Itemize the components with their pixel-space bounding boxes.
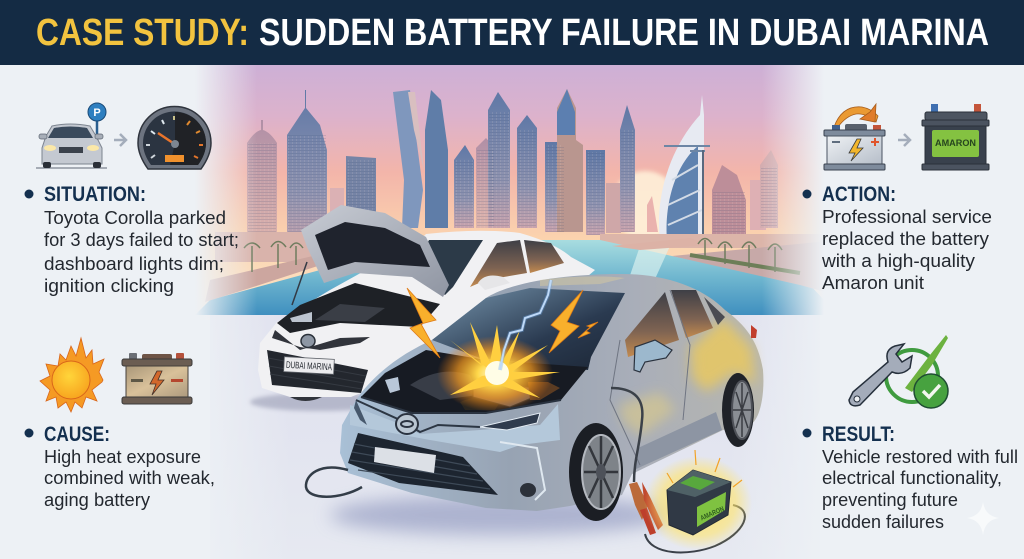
action text: [821, 206, 992, 293]
car body: [340, 274, 763, 511]
bullet: [24, 190, 34, 198]
grille and plate: [267, 350, 368, 393]
icon: dim dashboard gauge: [138, 106, 211, 169]
back white car with open hood: [250, 205, 595, 411]
lower door panel: [634, 412, 722, 470]
situation text: dashboard lights dim;: [44, 253, 224, 274]
icon: new Amaron battery: [922, 104, 989, 170]
headlight: [480, 413, 540, 430]
front logo: [301, 334, 315, 348]
front wheel: [569, 423, 623, 521]
new battery with glow: AMARON: [700, 506, 725, 522]
palm trees: [244, 238, 782, 272]
icon: new Amaron battery: AMARON: [935, 138, 976, 148]
icon: hot sun: [40, 338, 104, 412]
sparkle watermark: [967, 502, 999, 535]
result text: electrical functionality,: [822, 467, 1002, 488]
jumper clamps: [629, 482, 663, 535]
situation text: [44, 207, 239, 296]
action text: Amaron unit: [822, 272, 924, 293]
cause text: [44, 446, 215, 510]
icon: old battery: [122, 353, 192, 404]
spark explosion: [437, 322, 560, 412]
action text: replaced the battery: [822, 228, 990, 249]
arrow: [898, 134, 910, 146]
arrow: [114, 134, 126, 146]
cause text: combined with weak,: [44, 467, 215, 488]
panel: cause: [24, 338, 215, 510]
rear wheel: [722, 373, 754, 447]
front silver car with jump start: [306, 274, 763, 552]
side mirror: [634, 340, 672, 372]
icon: wrench and green check: [849, 335, 948, 408]
action text: Professional service: [822, 206, 992, 227]
panel: action: [802, 104, 992, 293]
result text: [822, 446, 1018, 532]
bullet: [24, 428, 34, 438]
left jumper cable: [306, 468, 362, 497]
front grille: [348, 433, 498, 495]
licence plate: Dubai Marina: [284, 357, 334, 374]
new battery with glow: [644, 450, 752, 550]
action text: with a high-quality: [821, 250, 976, 271]
situation text: ignition clicking: [44, 275, 174, 296]
bullet: [802, 428, 812, 438]
engine bay: [361, 350, 588, 413]
toyota logo: [396, 414, 418, 434]
engine bay of back car: [277, 283, 440, 333]
front fascia lines: [356, 400, 480, 432]
blue front fascia: [350, 404, 560, 452]
right jumper cable: [611, 388, 642, 482]
promenade strips: [215, 232, 830, 262]
licence plate: Dubai Marina: DUBAI MARINA: [286, 360, 333, 373]
heading: result: RESULT:: [822, 423, 895, 446]
cause text: aging battery: [44, 489, 151, 510]
hood edge: [361, 397, 561, 413]
fog lamp: [520, 483, 536, 497]
heading: situation: SITUATION:: [44, 183, 146, 206]
heading: cause: CAUSE:: [44, 423, 110, 446]
result text: sudden failures: [822, 511, 944, 532]
icon: old battery with swap arrow: [824, 104, 885, 170]
blue electric arc: [500, 280, 551, 370]
windshield: [432, 288, 625, 370]
cause text: High heat exposure: [44, 446, 201, 467]
situation text: Toyota Corolla parked: [44, 207, 226, 228]
blank plate: [374, 447, 436, 473]
water: [195, 240, 838, 315]
result text: Vehicle restored with full: [822, 446, 1018, 467]
orange lightning bolts: [407, 288, 598, 358]
skyline towers: [247, 89, 778, 250]
panel: situation: [24, 103, 239, 296]
heading: action: ACTION:: [822, 183, 896, 206]
icon: parked car: [36, 103, 107, 169]
promenade shores: [205, 238, 840, 302]
icon: Burj Al Arab: [659, 95, 710, 240]
background: Dubai Marina skyline scene: [180, 65, 840, 320]
situation text: for 3 days failed to start;: [44, 229, 239, 250]
side windows: [625, 290, 725, 357]
bullet: [802, 190, 812, 198]
result text: preventing future: [822, 489, 958, 510]
door lines: [610, 290, 690, 465]
panel: result: [802, 335, 1018, 532]
car shadow: [330, 495, 670, 535]
icon: parked car: P: [93, 107, 101, 119]
header banner: [0, 0, 1024, 65]
tail light: [751, 325, 757, 338]
gold reflections on body: [690, 318, 755, 392]
raised hood: [301, 205, 449, 297]
engine bay battery: [473, 387, 534, 407]
title: case study: CASE STUDY:: [36, 12, 249, 54]
ground: [190, 315, 830, 559]
